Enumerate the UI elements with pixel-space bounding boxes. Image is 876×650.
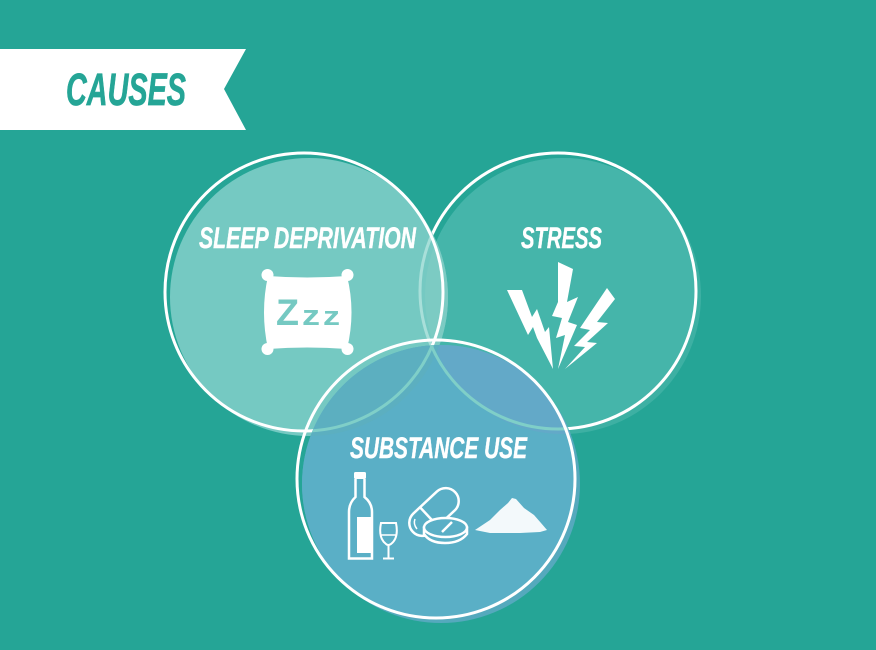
heading: stress: STRESS: [521, 222, 602, 255]
icon: wine bottle: [349, 472, 372, 558]
overlap: stress and substance: [437, 345, 570, 434]
banner: causes: [0, 49, 246, 130]
heading: substance use: SUBSTANCE USE: [350, 432, 528, 465]
panel: sleep deprivation circle: [164, 152, 448, 436]
venn diagram: [165, 153, 701, 623]
icon: powder pile: [475, 498, 547, 533]
overlap: sleep and stress: [418, 232, 448, 346]
panel: substance use circle: [296, 338, 580, 623]
icon: pills: [404, 483, 467, 543]
heading: sleep deprivation: SLEEP DEPRIVATION: [199, 222, 417, 255]
icon: lightning bolts: [507, 262, 615, 369]
panel: stress circle: [420, 153, 701, 434]
overlap: sleep and substance: [312, 345, 432, 432]
banner heading: CAUSES: [66, 64, 186, 115]
pillow zzz text: [276, 292, 340, 333]
pillow zzz text: Z: [276, 292, 299, 333]
pillow zzz text: z: [302, 300, 320, 332]
pillow zzz text: z: [323, 301, 340, 331]
icon: wine glass: [380, 523, 397, 558]
icon: pillow: [262, 269, 354, 355]
